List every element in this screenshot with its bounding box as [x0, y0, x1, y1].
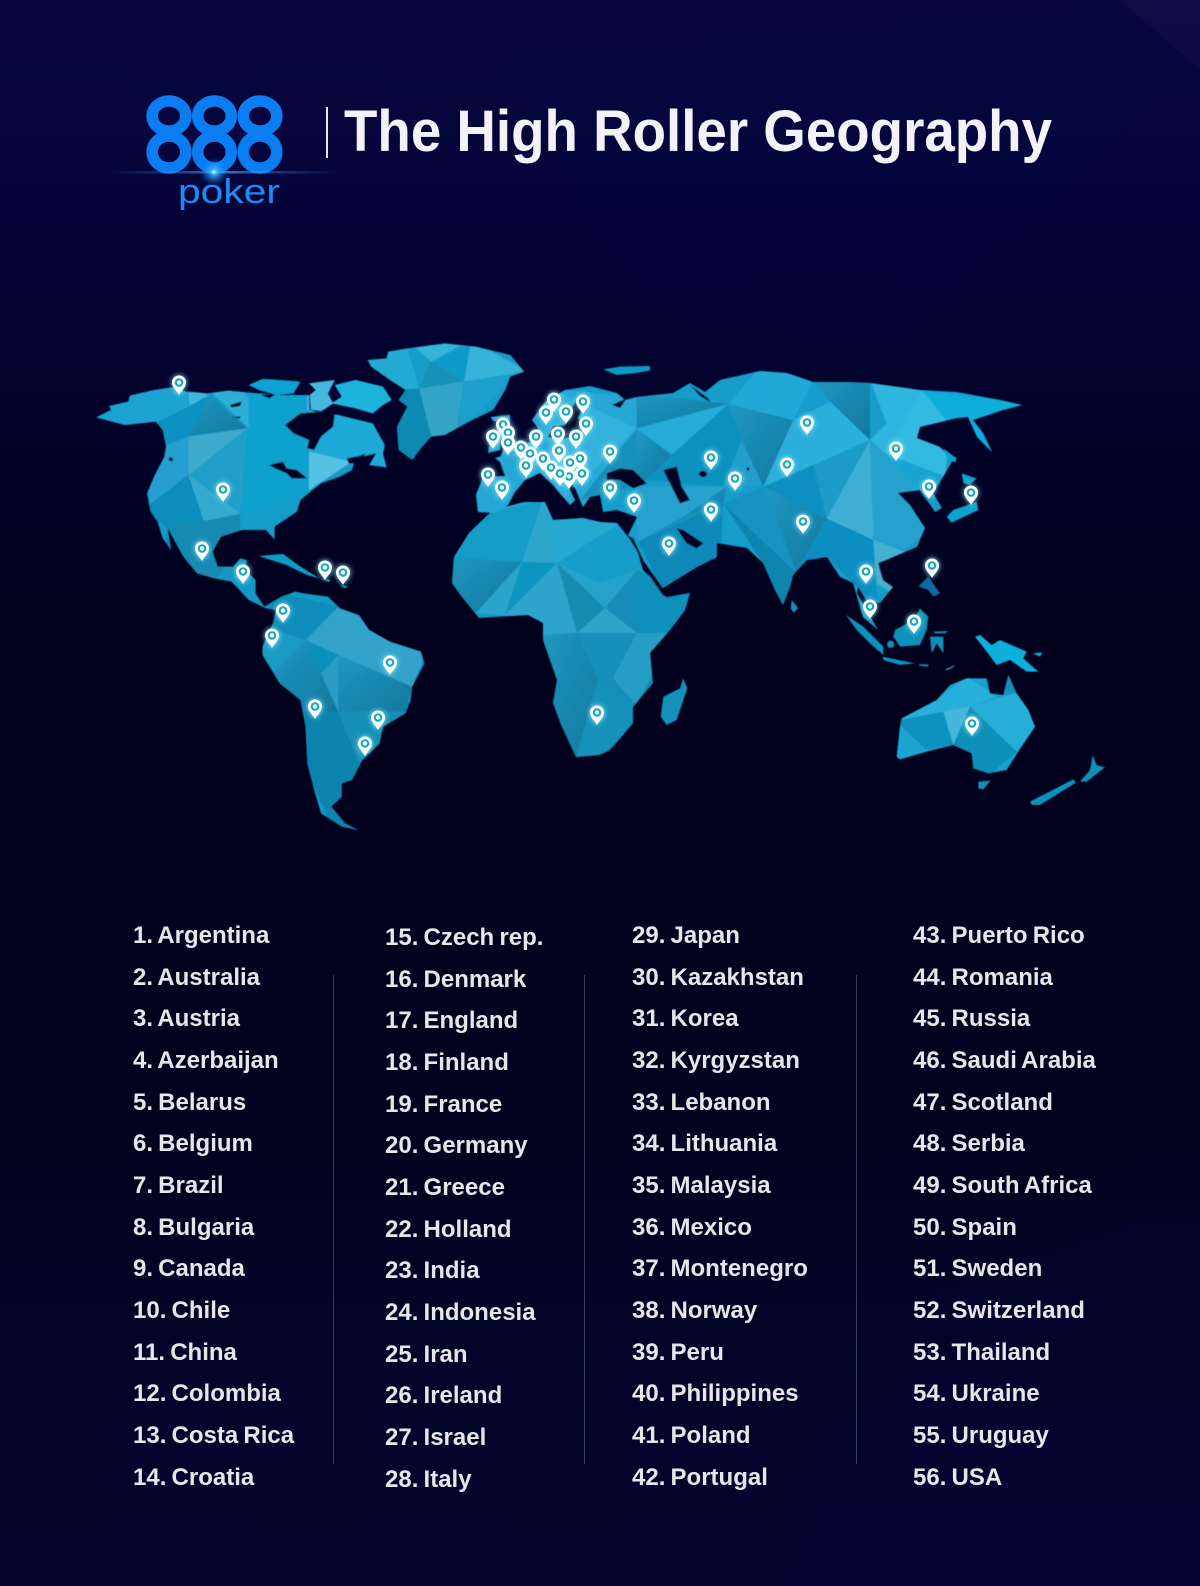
country list: column 2: 20. Germany: [385, 1132, 528, 1159]
title: The High Roller Geography: [344, 99, 1052, 164]
country list: column 2: 15. Czech rep.: [385, 924, 543, 951]
country list: column 1: 4. Azerbaijan: [133, 1047, 279, 1074]
country list: column 4: [913, 922, 1096, 1491]
landmass: Greenland: [362, 340, 528, 463]
country list: column 4: 49. South Africa: [913, 1172, 1092, 1199]
landmass: Africa: [451, 501, 690, 758]
country list: column 2: 19. France: [385, 1091, 502, 1118]
country list: column 3: 29. Japan: [632, 922, 740, 949]
country list: column 4: 47. Scotland: [913, 1089, 1053, 1116]
country list: column 3: 31. Korea: [632, 1005, 739, 1032]
world map: [80, 340, 1105, 847]
country list: column 3: 30. Kazakhstan: [632, 964, 804, 991]
country list: column 1: 5. Belarus: [133, 1089, 246, 1116]
country list: column 2: 17. England: [385, 1007, 518, 1034]
country list: column 1: [133, 922, 294, 1491]
country list: column 2: 21. Greece: [385, 1174, 505, 1201]
country list: column 2: 26. Ireland: [385, 1382, 502, 1409]
country list: column 2: 23. India: [385, 1257, 480, 1284]
landmass: Australia: [896, 674, 1036, 774]
country list: column 4: 43. Puerto Rico: [913, 922, 1085, 949]
country list: column 3: [632, 922, 808, 1491]
country list: column 1: 8. Bulgaria: [133, 1214, 254, 1241]
country list: column 2: 27. Israel: [385, 1424, 486, 1451]
country list: column 3: 39. Peru: [632, 1339, 724, 1366]
country list: column 3: 34. Lithuania: [632, 1130, 777, 1157]
logo mark: 888 rings: [152, 101, 277, 168]
country list: column 1: 10. Chile: [133, 1297, 230, 1324]
logo: 888 poker: [110, 101, 340, 211]
logo flare: [110, 158, 340, 186]
country list: column 3: 41. Poland: [632, 1422, 751, 1449]
location pins: [172, 376, 979, 756]
country list: column 3: 33. Lebanon: [632, 1089, 771, 1116]
country list: column 4: 55. Uruguay: [913, 1422, 1049, 1449]
country list: column 1: 7. Brazil: [133, 1172, 224, 1199]
seas and gulfs: Eurasia: [548, 385, 893, 597]
country list: column 4: 52. Switzerland: [913, 1297, 1085, 1324]
country list: column 4: 50. Spain: [913, 1214, 1017, 1241]
country list: column 1: 9. Canada: [133, 1255, 245, 1282]
country list: column 1: 2. Australia: [133, 964, 260, 991]
country list: column 2: 18. Finland: [385, 1049, 509, 1076]
country list: column 1: 3. Austria: [133, 1005, 240, 1032]
country list: column 1: 13. Costa Rica: [133, 1422, 294, 1449]
country list: column 3: 32. Kyrgyzstan: [632, 1047, 800, 1074]
country list: column 2: 25. Iran: [385, 1341, 468, 1368]
country list: column 3: 36. Mexico: [632, 1214, 752, 1241]
country list: column 3: 38. Norway: [632, 1297, 757, 1324]
landmass: Americas: [96, 378, 425, 830]
country list: column 2: 16. Denmark: [385, 966, 526, 993]
country list: column 3: 42. Portugal: [632, 1464, 768, 1491]
country list: column 1: 12. Colombia: [133, 1380, 281, 1407]
country list: column 4: 54. Ukraine: [913, 1380, 1040, 1407]
country list: column 3: 35. Malaysia: [632, 1172, 771, 1199]
country list: column 4: 51. Sweden: [913, 1255, 1042, 1282]
country list: column 4: 44. Romania: [913, 964, 1053, 991]
country list: column 1: 14. Croatia: [133, 1464, 254, 1491]
country list: column 2: 24. Indonesia: [385, 1299, 536, 1326]
country list: column 4: 46. Saudi Arabia: [913, 1047, 1096, 1074]
country list: column 1: 6. Belgium: [133, 1130, 253, 1157]
landmasses: [80, 340, 1105, 847]
landmass: Eurasia: [475, 370, 1022, 630]
country list: column 1: 1. Argentina: [133, 922, 269, 949]
country list: column 4: 45. Russia: [913, 1005, 1030, 1032]
logo word: poker: [178, 173, 280, 211]
islands: Asia and Oceania: [603, 366, 1105, 805]
country list: column 3: 40. Philippines: [632, 1380, 799, 1407]
country list: column 3: 37. Montenegro: [632, 1255, 808, 1282]
title divider: [326, 107, 328, 158]
lakes and bays: North America: [169, 394, 366, 478]
country list: column 4: 53. Thailand: [913, 1339, 1050, 1366]
country list: column 2: 28. Italy: [385, 1466, 472, 1493]
country list: column 1: 11. China: [133, 1339, 237, 1366]
country list: column 2: 22. Holland: [385, 1216, 512, 1243]
island: Madagascar: [661, 678, 687, 725]
country list: column 2: [385, 924, 543, 1493]
country list: column 4: 48. Serbia: [913, 1130, 1025, 1157]
country list: column 4: 56. USA: [913, 1464, 1002, 1491]
